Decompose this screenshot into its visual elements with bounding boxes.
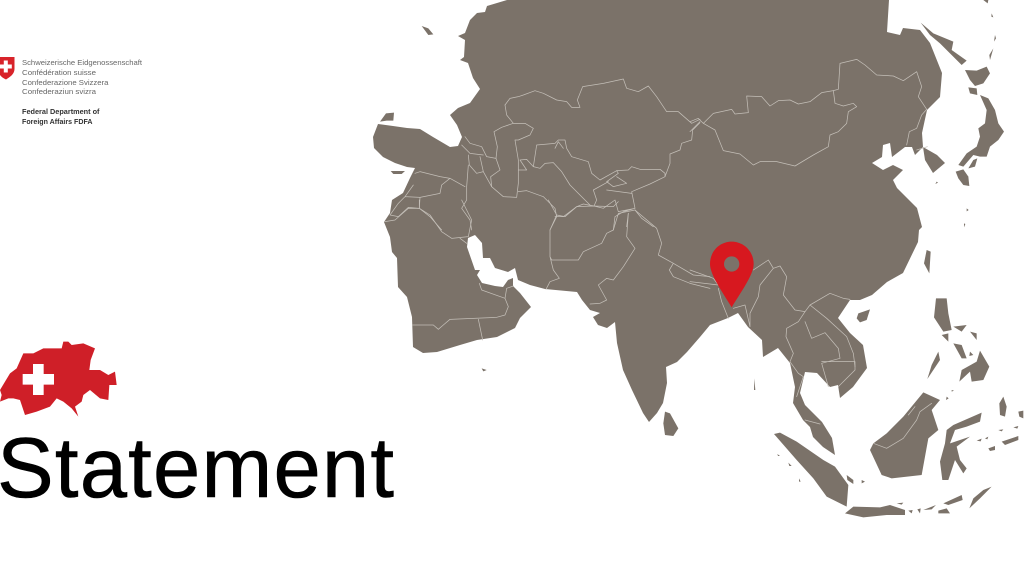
- landmass: [373, 0, 945, 455]
- logo text: department name: [22, 107, 100, 126]
- icon: red location pin on Bangladesh: [710, 242, 754, 307]
- logo text: department name: Federal Department of: [22, 107, 100, 116]
- logo text: names of the Confederation: Confederaziun svizra: [22, 87, 96, 96]
- country borders south-east Asia: [690, 260, 932, 448]
- logo text: names of the Confederation: [22, 58, 142, 96]
- logo text: names of the Confederation: Schweizerische Eidgenossenschaft: [22, 58, 142, 67]
- logo: Swiss federal administration: [0, 57, 142, 126]
- islands: Sri Lanka and Maldives: [482, 368, 678, 436]
- icon: red map of Switzerland with white cross: [0, 342, 117, 417]
- islands: Mediterranean and Arabian Sea: [380, 26, 433, 174]
- map of Asia: [373, 0, 1023, 517]
- country borders north-east Asia: [690, 59, 927, 166]
- logo text: department name: Foreign Affairs FDFA: [22, 117, 92, 126]
- country borders south Asia and Arabia: [385, 200, 710, 340]
- islands: Japan and Sakhalin: [921, 0, 1004, 227]
- logo text: names of the Confederation: Confederazione Svizzera: [22, 78, 108, 87]
- islands: Southeast Asia: [754, 250, 1023, 517]
- title: Statement: [0, 421, 394, 516]
- country borders west and central: [390, 79, 700, 230]
- logo text: names of the Confederation: Confédération suisse: [22, 68, 96, 77]
- icon: Swiss shield: [0, 57, 14, 80]
